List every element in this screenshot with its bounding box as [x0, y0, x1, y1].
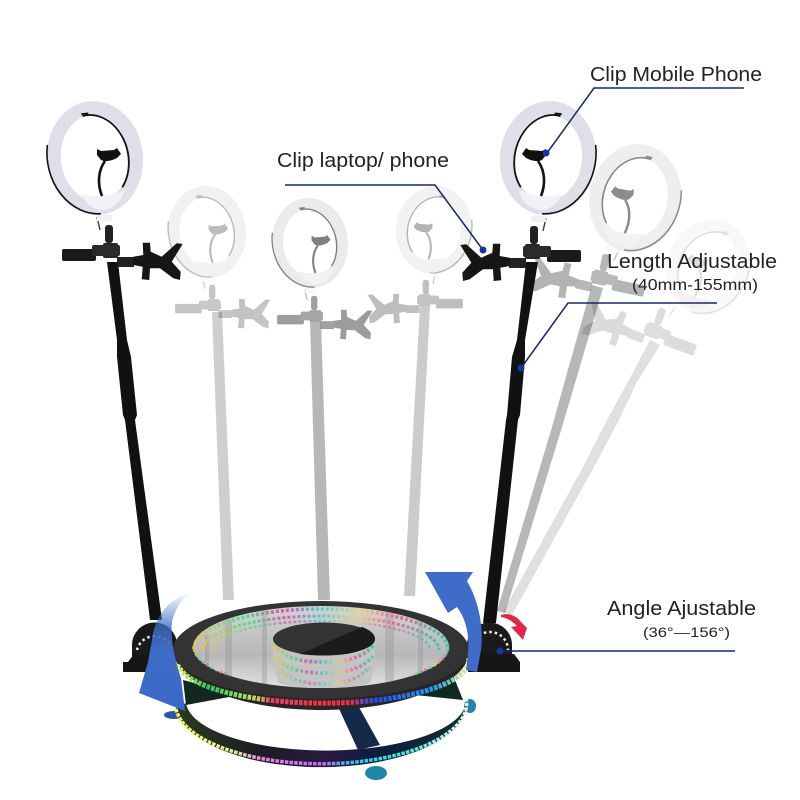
- label: Clip laptop/ phone: [277, 150, 486, 254]
- label: Length Adjustable: Length Adjustable: [607, 251, 777, 273]
- label: Clip Mobile Phone: [542, 63, 762, 156]
- label: Length Adjustable: (40mm-155mm): [632, 277, 758, 294]
- infinity mirror glass: [193, 606, 449, 688]
- ghost stand: left of centre: [167, 188, 270, 600]
- left main stand with ring light: [46, 104, 183, 620]
- centre disc: [273, 622, 375, 656]
- centre column: [273, 639, 375, 688]
- ghost stand: right of centre: [368, 188, 473, 596]
- right stand base: [467, 622, 520, 672]
- label: Length Adjustable: [518, 251, 777, 372]
- label: Clip laptop/ phone: Clip laptop/ phone: [277, 150, 449, 172]
- ghost stand: tilted: [497, 142, 687, 613]
- label: Angle Ajustable: Angle Ajustable: [607, 598, 756, 620]
- left stand base: [123, 622, 177, 672]
- blue arrow: left rotation: [139, 592, 191, 711]
- ghost stand: most tilted: [503, 213, 760, 615]
- ghost stand: centre: [271, 200, 372, 600]
- blue arrow: right rotation: [425, 572, 482, 672]
- feet: [164, 699, 476, 780]
- label: Angle Ajustable: [496, 598, 756, 654]
- rotating platform: [173, 601, 469, 710]
- label: Clip Mobile Phone: Clip Mobile Phone: [590, 63, 762, 86]
- lower LED ring and legs: [164, 675, 476, 780]
- right main stand with ring light: [460, 104, 597, 623]
- label: Angle Ajustable: (36°—156°): [643, 624, 730, 640]
- red arrow: angle adjustment: [501, 614, 527, 640]
